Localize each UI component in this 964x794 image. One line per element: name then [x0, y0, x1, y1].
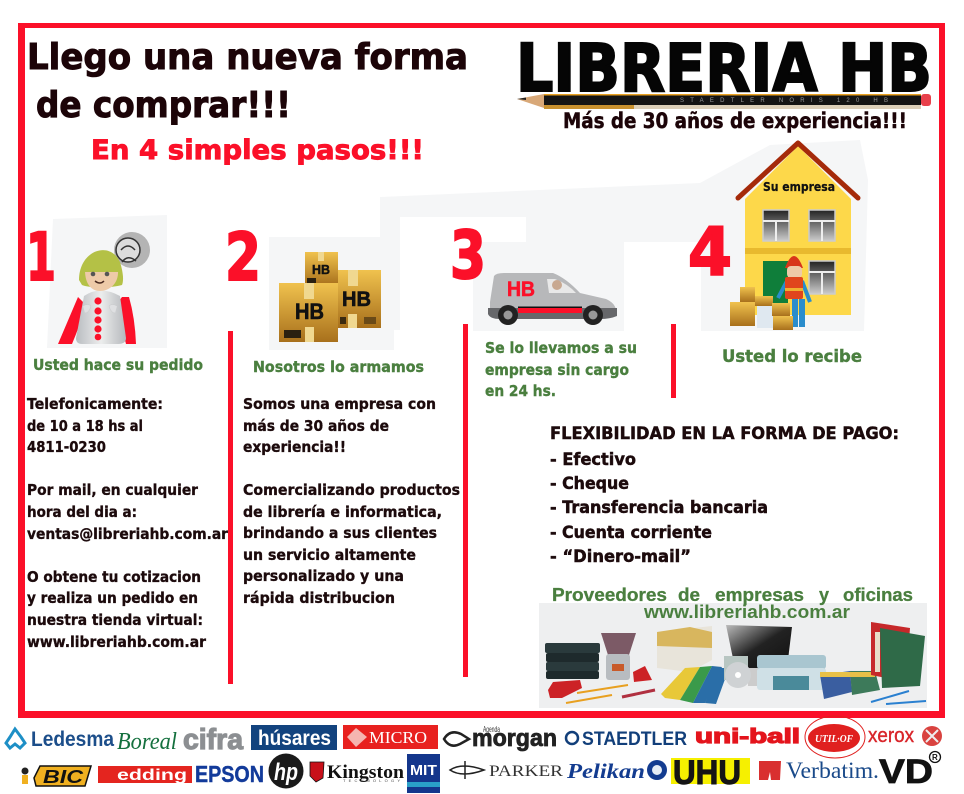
subtitle: 4 simples pasos: En 4 simples pasos!!! [91, 135, 424, 166]
step 2 text: Somos una empresa con [243, 395, 436, 413]
divider 3 [671, 324, 676, 398]
payment flexibility block [550, 424, 899, 567]
logo: morgan: morgan [472, 725, 557, 752]
logo: UHU: UHU [673, 754, 741, 792]
green and yellow folder packs [661, 666, 729, 704]
step 2 text: un servicio altamente [243, 546, 416, 564]
logo: hp [268, 754, 304, 788]
step 1 number: 1 [26, 219, 56, 296]
grey image backgrounds [47, 140, 868, 350]
logo: verbatim: Verbatim. [786, 758, 879, 783]
title: nueva forma de comprar: de comprar!!! [36, 85, 291, 126]
step 3 caption [485, 339, 637, 400]
step 1 text [27, 395, 229, 651]
payment flexibility block: FLEXIBILIDAD EN LA FORMA DE PAGO: [550, 424, 899, 444]
step 3 caption: en 24 hs. [485, 382, 556, 400]
title: nueva forma de comprar [27, 37, 468, 126]
paper box [657, 626, 712, 672]
brand logos row 2 [22, 752, 940, 793]
step 1 text: y realiza un pedido en [27, 589, 198, 607]
logo: hp: hp [274, 759, 298, 786]
logo: kingston: TECHNOLOGY [343, 778, 400, 783]
supplier heading: de [678, 584, 700, 605]
icon: delivery van: HB [507, 278, 535, 301]
monitor [726, 625, 792, 686]
logo: parker [450, 761, 564, 780]
step 1 text: O obtene tu cotizacion [27, 568, 201, 586]
logo: pelikan: Pelikan [566, 759, 645, 783]
logo: MIT: MIT [410, 762, 437, 779]
logo: VD: VD [879, 753, 933, 791]
stapler [548, 680, 582, 698]
payment flexibility block: - Cheque [550, 474, 629, 494]
step 4 number: 4 [688, 214, 732, 291]
logo: micro: MICRO [369, 728, 427, 747]
step 2 text: rápida distribucion [243, 589, 395, 607]
pencil cup [601, 633, 636, 680]
logo: husares: húsares [258, 727, 331, 750]
office supplies panel [539, 603, 927, 708]
step 1 text: Por mail, en cualquier [27, 481, 199, 499]
logo: edding [98, 766, 192, 784]
step 2 text: brindando a sus clientes [243, 524, 437, 542]
supplier heading: www.libreriahb.com.ar [643, 602, 850, 622]
icon: HB boxes: HB [342, 288, 371, 311]
logo: Ledesma: Ledesma [31, 728, 114, 751]
icon: pencil: STAEDTLER NORIS 120 HB [680, 98, 888, 104]
step 2 text: personalizado y una [243, 567, 404, 585]
step 2 text: experiencia!! [243, 438, 346, 456]
icon: house with delivery worker: Su empresa [763, 180, 835, 194]
logo: util-of: UTIL·OF [815, 734, 853, 745]
step 4 caption: Usted lo recibe [722, 347, 862, 367]
tagline: experience: Más de 30 años de experiencia!!! [563, 109, 907, 133]
icon: HB boxes: HB [312, 262, 330, 277]
supplier heading: Proveedores [552, 584, 667, 605]
step 1 text: hora del dia a: [27, 503, 137, 521]
divider 2 [463, 324, 468, 677]
logo: MIT [407, 754, 440, 793]
step 2 text [243, 395, 460, 607]
payment flexibility block: - Cuenta corriente [550, 523, 712, 543]
step 1 caption: Usted hace su pedido [33, 356, 203, 374]
logo: epson: EPSON [195, 761, 264, 787]
logo: cifra: cifra [183, 724, 244, 756]
logo: BIC [22, 766, 91, 787]
CD stack [724, 656, 751, 688]
step 1 text: ventas@libreriahb.com.ar [27, 525, 229, 543]
payment flexibility block: - Efectivo [550, 450, 636, 470]
logo: pelikan [566, 759, 667, 783]
brand logos row 1 [6, 716, 942, 758]
step 3 caption: empresa sin cargo [485, 361, 629, 379]
step 2 caption: Nosotros lo armamos [253, 358, 424, 376]
supplier heading [552, 584, 913, 622]
step 3 number: 3 [450, 217, 486, 294]
logo: BIC: BIC [43, 767, 84, 787]
logo: kingston: Kingston [327, 762, 404, 783]
payment flexibility block: - Transferencia bancaria [550, 498, 768, 518]
logo: xerox: xerox [868, 725, 914, 747]
red binder clip [633, 666, 652, 682]
logo: parker: PARKER [489, 763, 564, 780]
logo: uni-ball: uni-ball [695, 726, 800, 748]
icon: house with delivery worker [730, 143, 858, 330]
folders [820, 671, 880, 699]
binders [871, 622, 925, 688]
logo: staedtler: STAEDTLER [582, 729, 687, 750]
supplier heading: oficinas [843, 584, 913, 605]
step 1 text: www.libreriahb.com.ar [27, 633, 207, 651]
step 1 text: de 10 a 18 hs al [27, 417, 143, 435]
pencils and pens [566, 685, 926, 704]
icon: HB boxes: HB [295, 299, 324, 324]
payment flexibility block: - “Dinero-mail” [550, 547, 691, 567]
step 2 text: más de 30 años de [243, 417, 389, 435]
logo: xerox [868, 725, 942, 747]
icon: HB boxes [279, 252, 381, 342]
toner cartridges [545, 643, 600, 679]
supplier heading: empresas [715, 584, 804, 605]
title: nueva forma de comprar: Llego una nueva forma [27, 37, 468, 78]
step 1 text: nuestra tienda virtual: [27, 611, 203, 629]
step 1 text: 4811-0230 [27, 438, 106, 456]
step 2 text: Comercializando productos [243, 481, 460, 499]
logo: micro [343, 725, 438, 749]
logo: Boreal: Boreal [117, 729, 177, 755]
divider 1 [228, 331, 233, 684]
printer [757, 655, 826, 690]
step 1 text: Telefonicamente: [27, 395, 163, 413]
supplier heading: y [819, 584, 830, 605]
logo: morgan: Agenda [483, 725, 500, 734]
step 2 text: de librería e informatica, [243, 503, 442, 521]
logo: util-of [805, 716, 865, 758]
icon: pencil [517, 94, 931, 109]
step 3 caption: Se lo llevamos a su [485, 339, 637, 357]
logo: edding: edding [117, 767, 187, 784]
logo: VD: R [932, 753, 938, 762]
icon: delivery van [488, 273, 617, 325]
icon: customer figure [58, 232, 150, 344]
step 2 number: 2 [225, 219, 261, 296]
